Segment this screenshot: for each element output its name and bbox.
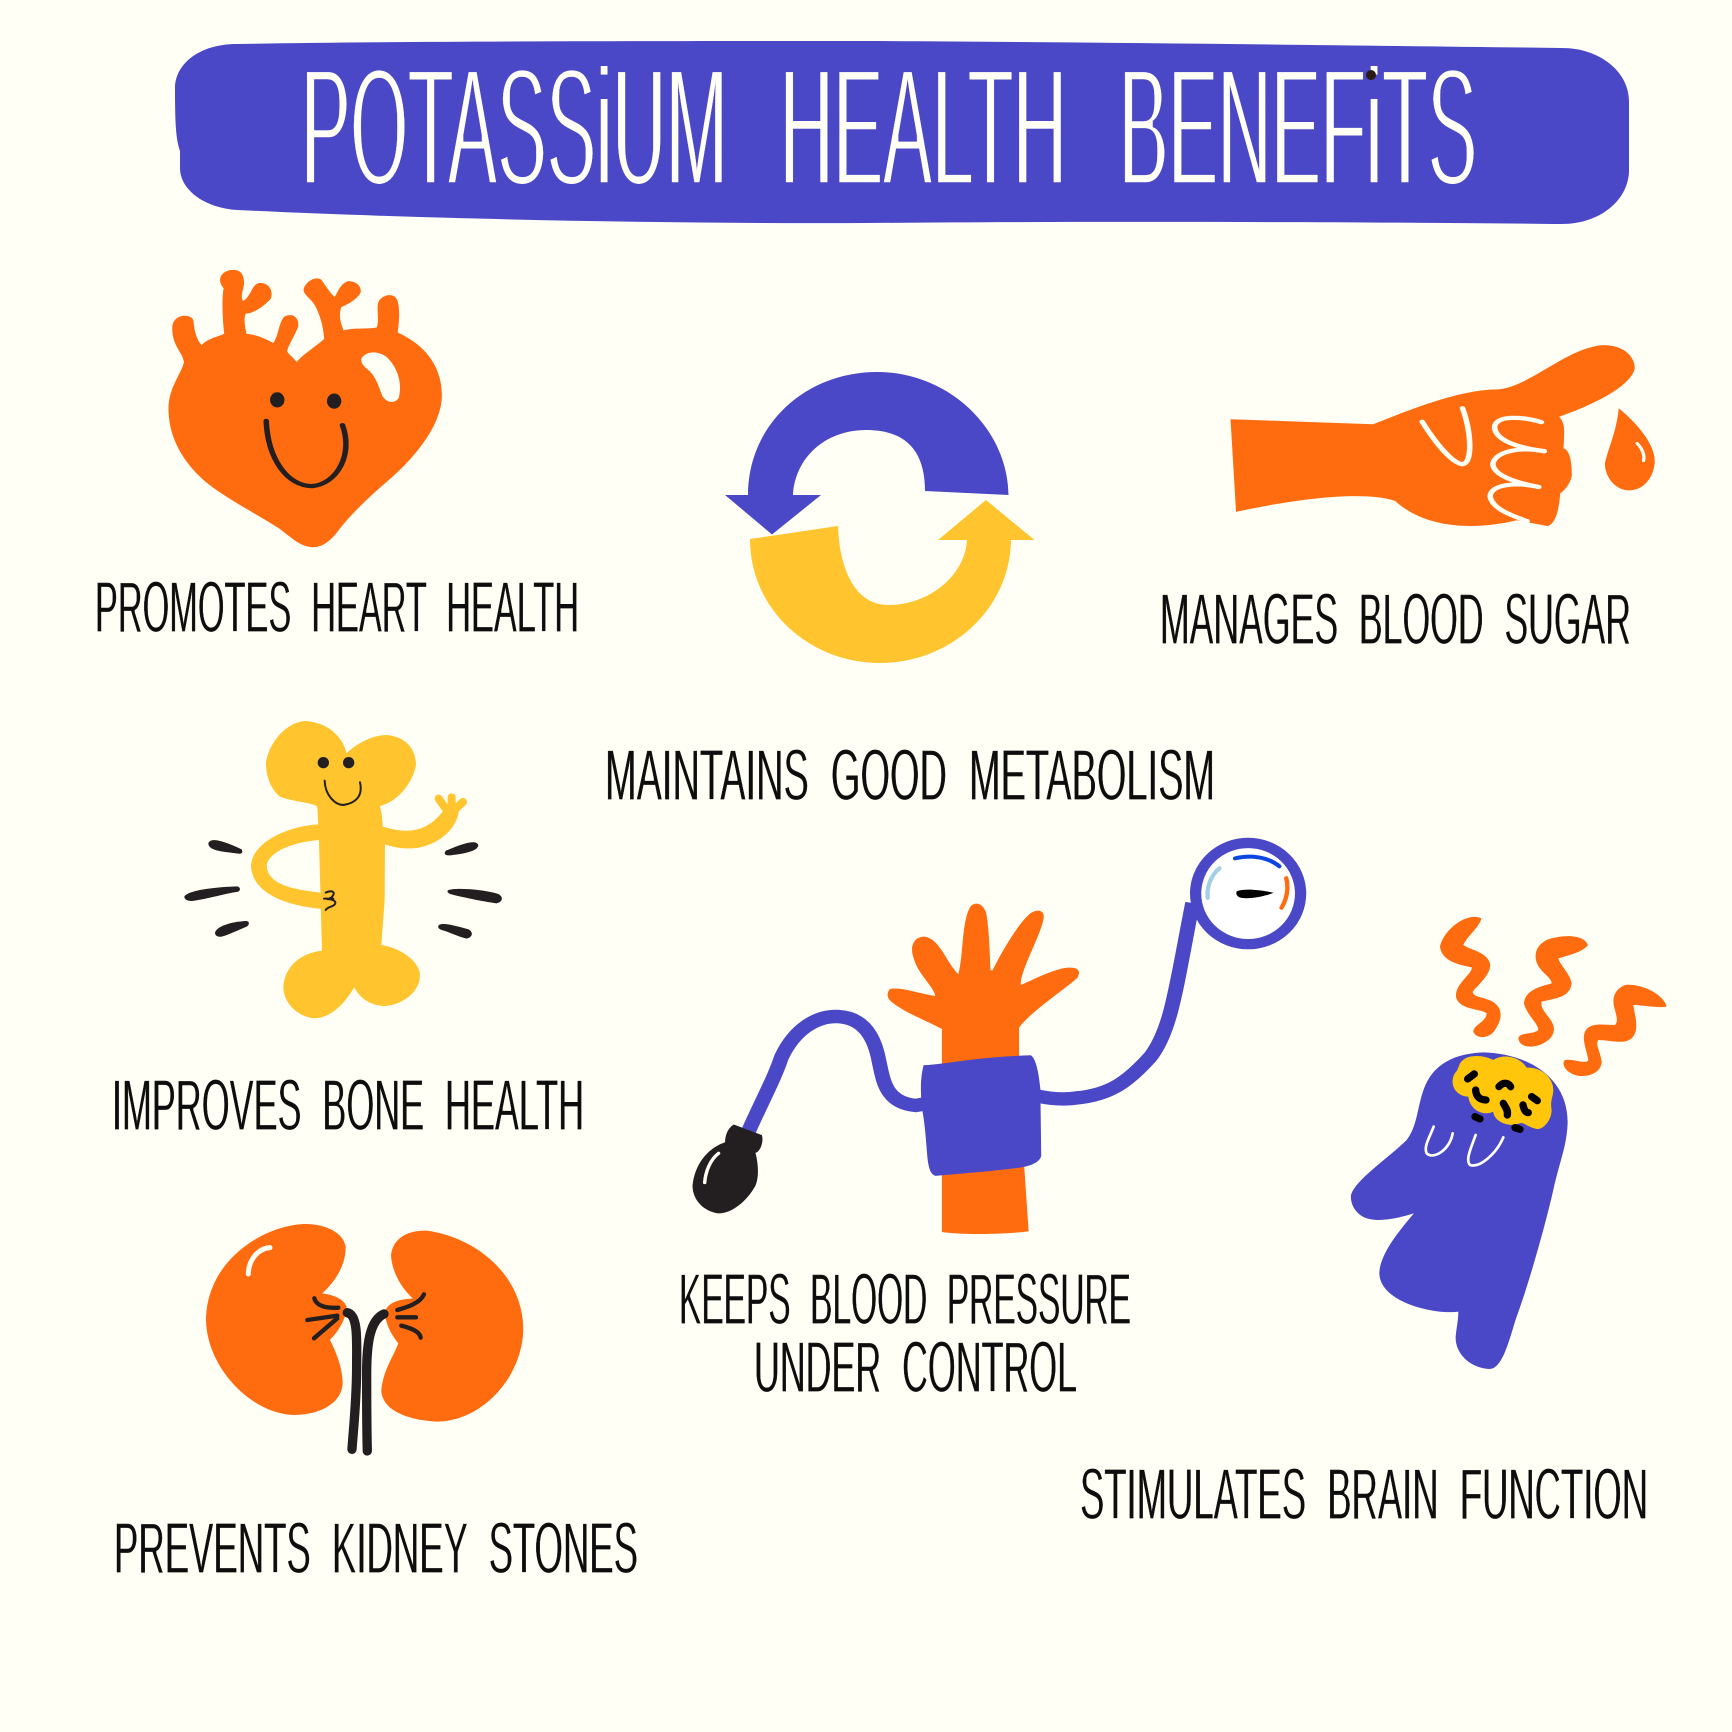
icon: blood pressure cuff on raised hand bbox=[693, 843, 1301, 1234]
title dot on last i bbox=[1366, 70, 1376, 80]
panel: brain function bbox=[1080, 917, 1667, 1535]
icon: head with brain and squiggles bbox=[1351, 917, 1667, 1369]
panel: blood pressure: KEEPS BLOOD PRESSURE bbox=[679, 1260, 1131, 1340]
label: maintains good metabolism: MAINTAINS GOOD METABOLISM bbox=[605, 736, 1215, 816]
title banner bbox=[175, 33, 1629, 224]
panel: bone health bbox=[112, 721, 584, 1146]
icon: kidneys bbox=[206, 1224, 523, 1451]
panel: kidney stones bbox=[114, 1224, 638, 1589]
panel: blood pressure bbox=[679, 843, 1301, 1408]
label: keeps blood pressure under control bbox=[679, 1260, 1131, 1408]
icon: yellow cycle arrow bbox=[750, 500, 1034, 663]
panel: blood sugar bbox=[1160, 345, 1655, 660]
text: IMPROVES BONE HEALTH bbox=[112, 1066, 584, 1146]
label: keeps blood pressure under control: UNDER CONTROL bbox=[754, 1328, 1077, 1408]
text: PROMOTES HEART HEALTH bbox=[95, 568, 579, 648]
icon: pointing hand with drop bbox=[1231, 345, 1655, 526]
label: prevents kidney stones: PREVENTS KIDNEY STONES bbox=[114, 1509, 638, 1589]
panel: heart health bbox=[95, 270, 579, 648]
panel: metabolism bbox=[605, 372, 1215, 816]
icon: blue cycle arrow bbox=[725, 372, 1008, 534]
icon: smiling heart bbox=[168, 270, 442, 547]
icon: smiling bone bbox=[184, 721, 502, 1018]
